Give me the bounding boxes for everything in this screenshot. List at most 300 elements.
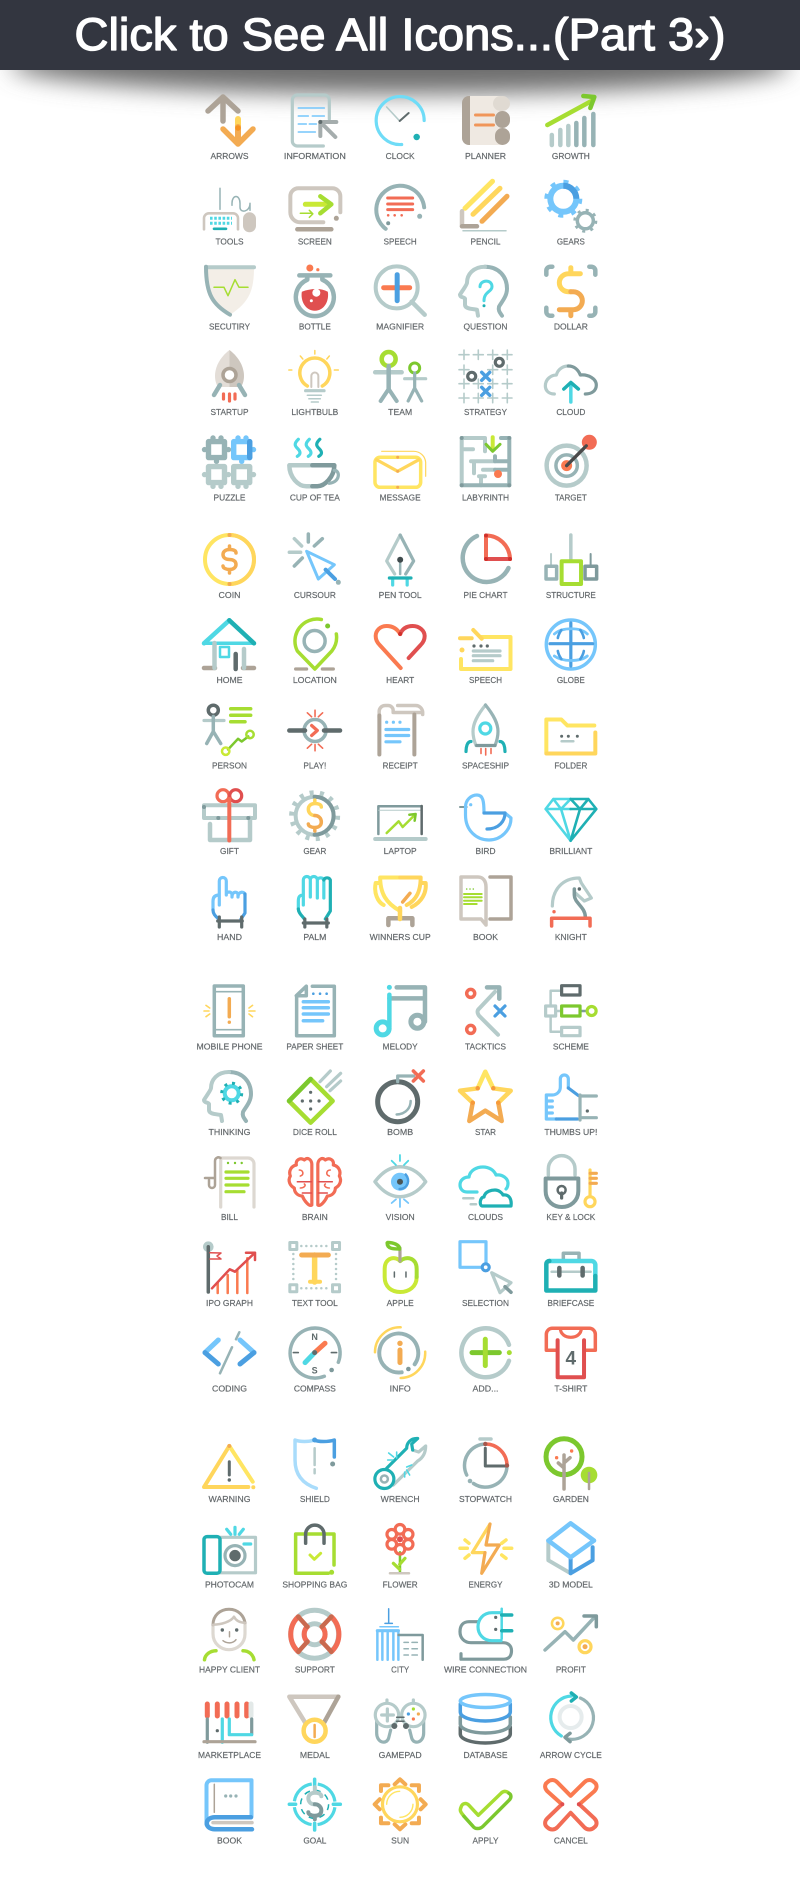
icon: wire connection bbox=[460, 1609, 512, 1659]
icon: medal bbox=[289, 1697, 338, 1742]
cell: thinking bbox=[204, 1072, 251, 1137]
cell: text tool bbox=[290, 1242, 340, 1308]
icon: compass bbox=[290, 1328, 340, 1378]
label: wire connection: WIRE CONNECTION bbox=[444, 1665, 527, 1675]
cell: thumbs up bbox=[544, 1075, 597, 1137]
icon: gamepad bbox=[375, 1700, 425, 1742]
label: structure: STRUCTURE bbox=[546, 590, 596, 600]
icon: cancel bbox=[545, 1780, 597, 1830]
icon: play bbox=[289, 710, 340, 751]
cell: bottle bbox=[296, 268, 334, 332]
label: happy client: HAPPY CLIENT bbox=[199, 1665, 260, 1675]
cell: medal bbox=[289, 1697, 338, 1760]
label: home: HOME bbox=[216, 675, 243, 685]
cell: cancel bbox=[545, 1780, 597, 1845]
cell: melody bbox=[376, 987, 425, 1052]
label: pie chart: PIE CHART bbox=[464, 590, 508, 600]
label: info: INFO bbox=[390, 1383, 411, 1393]
label: screen: SCREEN bbox=[298, 236, 332, 246]
icon: person bbox=[204, 705, 254, 755]
cell: message bbox=[375, 451, 426, 502]
cell: mobile phone bbox=[196, 986, 263, 1052]
label: database: DATABASE bbox=[464, 1750, 508, 1760]
cell: compass bbox=[290, 1328, 340, 1393]
label: cursour: CURSOUR bbox=[294, 590, 336, 600]
cell: location bbox=[293, 619, 337, 685]
icon: labyrinth bbox=[462, 437, 509, 485]
cell: strategy bbox=[459, 350, 512, 417]
icon: winners cup bbox=[375, 878, 426, 925]
icon: pie chart bbox=[463, 536, 510, 582]
icon: happy client bbox=[204, 1609, 254, 1660]
cell: bird bbox=[460, 795, 511, 856]
label: coding: CODING bbox=[212, 1383, 247, 1393]
icon: vision bbox=[375, 1155, 426, 1207]
icon: puzzle bbox=[204, 438, 254, 486]
label: tools: TOOLS bbox=[216, 236, 244, 246]
label: medal: MEDAL bbox=[300, 1750, 330, 1760]
cell: brain bbox=[289, 1159, 341, 1222]
icon: screen bbox=[290, 188, 340, 229]
label: selection: SELECTION bbox=[462, 1298, 509, 1308]
label: add: ADD... bbox=[472, 1383, 498, 1393]
icon: shopping bag bbox=[296, 1525, 334, 1573]
header shadow bbox=[10, 34, 790, 94]
cell: clock bbox=[376, 97, 424, 161]
icon: speech bbox=[376, 186, 424, 229]
cell: shield bbox=[295, 1440, 334, 1504]
cell: paper sheet bbox=[286, 986, 343, 1052]
cell: gear bbox=[292, 793, 338, 856]
compass letter S: S bbox=[312, 1365, 318, 1375]
label: sun: SUN bbox=[391, 1835, 409, 1845]
cell: shopping bag bbox=[282, 1525, 347, 1589]
icon: shield bbox=[295, 1440, 334, 1488]
label: photocam: PHOTOCAM bbox=[205, 1579, 254, 1589]
icon: lightbulb bbox=[289, 350, 338, 402]
icon: flower bbox=[387, 1524, 413, 1573]
cell: cloud bbox=[545, 366, 596, 417]
label: speech: SPEECH bbox=[384, 236, 417, 246]
icon: support bbox=[291, 1610, 339, 1658]
cell: palm bbox=[298, 876, 330, 942]
icon: message bbox=[375, 451, 426, 487]
label: flower: FLOWER bbox=[383, 1579, 418, 1589]
cell: apple bbox=[385, 1242, 417, 1308]
icon: coding bbox=[205, 1332, 254, 1373]
panel: icon group 1 bbox=[204, 95, 596, 502]
icon: star bbox=[460, 1072, 511, 1121]
cell: dollar bbox=[546, 267, 595, 332]
label: thumbs up: THUMBS UP! bbox=[544, 1127, 597, 1137]
icon: folder bbox=[546, 720, 595, 754]
icon: secutiry bbox=[206, 267, 254, 315]
icon: selection bbox=[460, 1242, 511, 1293]
label: support: SUPPORT bbox=[295, 1665, 335, 1675]
icon: information bbox=[292, 95, 336, 146]
cell: lightbulb bbox=[289, 350, 339, 417]
compass letter N: N bbox=[311, 1332, 318, 1342]
label: spaceship: SPACESHIP bbox=[462, 760, 509, 770]
icon: speech 2 bbox=[460, 630, 510, 669]
icon: spaceship bbox=[466, 705, 505, 755]
cell: flower bbox=[383, 1524, 418, 1589]
cell: structure bbox=[546, 535, 597, 600]
label: goal: GOAL bbox=[303, 1835, 327, 1845]
icon: home bbox=[204, 620, 254, 669]
t-shirt number: 4 bbox=[566, 1348, 577, 1369]
label: scheme: SCHEME bbox=[553, 1042, 589, 1052]
icon: growth bbox=[547, 96, 594, 145]
icon: wrench bbox=[375, 1438, 426, 1488]
title: Click to See All Icons...(Part 3›) bbox=[74, 9, 726, 60]
cell: warning bbox=[204, 1446, 253, 1504]
label: gamepad: GAMEPAD bbox=[379, 1750, 422, 1760]
label: melody: MELODY bbox=[383, 1042, 418, 1052]
icon: dollar bbox=[546, 267, 595, 316]
cell: labyrinth bbox=[462, 437, 509, 502]
label: winners cup: WINNERS CUP bbox=[370, 932, 431, 942]
icon: photocam bbox=[204, 1527, 256, 1573]
label: brain: BRAIN bbox=[302, 1212, 328, 1222]
label: heart: HEART bbox=[386, 675, 414, 685]
cell: dice roll bbox=[289, 1071, 341, 1137]
icon: melody bbox=[376, 987, 425, 1035]
label: dice roll: DICE ROLL bbox=[293, 1127, 337, 1137]
label: clouds: CLOUDS bbox=[468, 1212, 503, 1222]
cell: brilliant bbox=[546, 799, 596, 856]
icon: sun bbox=[375, 1779, 426, 1829]
label: team: TEAM bbox=[388, 407, 412, 417]
label: labyrinth: LABYRINTH bbox=[462, 492, 509, 502]
label: lightbulb: LIGHTBULB bbox=[291, 407, 339, 417]
icon: heart bbox=[376, 626, 425, 668]
icon: book bbox=[461, 877, 511, 925]
icon: dice roll bbox=[289, 1071, 341, 1123]
label: target: TARGET bbox=[555, 492, 587, 502]
icon: strategy bbox=[459, 350, 512, 403]
cell: globe bbox=[546, 620, 595, 685]
icon: cup of tea bbox=[289, 439, 338, 486]
icon: book 2 bbox=[206, 1780, 252, 1829]
label: pen tool: PEN TOOL bbox=[379, 590, 422, 600]
cell: gamepad bbox=[375, 1700, 425, 1760]
label: palm: PALM bbox=[303, 932, 326, 942]
label: book: BOOK bbox=[473, 932, 498, 942]
header banner bbox=[0, 0, 800, 70]
cell: magnifier bbox=[376, 266, 425, 332]
icon: database bbox=[460, 1694, 510, 1743]
panel: icon group 3 bbox=[196, 986, 597, 1393]
cell: add bbox=[461, 1328, 509, 1393]
icon: text tool bbox=[290, 1242, 340, 1292]
label: coin: COIN bbox=[218, 590, 240, 600]
cell: selection bbox=[460, 1242, 511, 1308]
label: gift: GIFT bbox=[220, 846, 239, 856]
label: book 2: BOOK bbox=[217, 1835, 242, 1845]
label: text tool: TEXT TOOL bbox=[292, 1298, 338, 1308]
label: cup of tea: CUP OF TEA bbox=[290, 492, 340, 502]
cell: team bbox=[375, 352, 426, 417]
label: pencil: PENCIL bbox=[470, 236, 501, 246]
icon: cloud bbox=[545, 366, 596, 402]
label: stopwatch: STOPWATCH bbox=[459, 1494, 512, 1504]
label: cloud: CLOUD bbox=[556, 407, 585, 417]
icon: magnifier bbox=[376, 266, 425, 315]
cell: t-shirt bbox=[546, 1328, 595, 1393]
cell: goal bbox=[289, 1779, 340, 1845]
label: bird: BIRD bbox=[476, 846, 496, 856]
cell: information bbox=[284, 95, 346, 161]
label: knight: KNIGHT bbox=[555, 932, 587, 942]
label: folder: FOLDER bbox=[554, 760, 587, 770]
icon grid bbox=[196, 95, 602, 1845]
cell: wrench bbox=[375, 1438, 426, 1504]
cell: knight bbox=[552, 878, 591, 942]
cell: stopwatch bbox=[459, 1439, 512, 1504]
icon: structure bbox=[546, 535, 597, 584]
icon: ipo graph bbox=[208, 1247, 255, 1293]
icon: tacktics bbox=[467, 987, 505, 1035]
icon: marketplace bbox=[204, 1704, 255, 1742]
icon: clock bbox=[376, 97, 424, 145]
icon: profit bbox=[545, 1616, 596, 1653]
cell: coding bbox=[205, 1332, 254, 1393]
icon: laptop bbox=[375, 806, 426, 839]
icon: bomb bbox=[378, 1071, 423, 1122]
label: globe: GLOBE bbox=[557, 675, 585, 685]
cell: person bbox=[204, 705, 254, 770]
cell: scheme bbox=[546, 986, 596, 1052]
cell: profit bbox=[545, 1616, 596, 1675]
label: profit: PROFIT bbox=[556, 1665, 586, 1675]
icon: city bbox=[377, 1609, 423, 1660]
cell: secutiry bbox=[206, 267, 254, 332]
label: bill: BILL bbox=[221, 1212, 238, 1222]
cell: hand bbox=[213, 878, 245, 942]
label: play: PLAY! bbox=[303, 760, 326, 770]
label: gear: GEAR bbox=[303, 846, 326, 856]
cell: bomb bbox=[378, 1071, 423, 1137]
label: marketplace: MARKETPLACE bbox=[198, 1750, 261, 1760]
cell: arrows bbox=[208, 97, 253, 161]
cell: photocam bbox=[204, 1527, 256, 1589]
label: dollar: DOLLAR bbox=[554, 322, 588, 332]
cell: screen bbox=[290, 188, 340, 246]
label: garden: GARDEN bbox=[553, 1494, 589, 1504]
cell: folder bbox=[546, 720, 595, 770]
cell: arrow cycle bbox=[540, 1693, 602, 1760]
icon: receipt bbox=[379, 706, 423, 754]
icon: pen tool bbox=[387, 535, 414, 585]
cell: heart bbox=[376, 626, 425, 685]
icon: apply bbox=[460, 1791, 511, 1829]
icon: bird bbox=[460, 795, 511, 840]
cell: startup bbox=[210, 350, 249, 417]
label: message: MESSAGE bbox=[380, 492, 421, 502]
cell: coin bbox=[205, 535, 254, 600]
cell: happy client bbox=[199, 1609, 260, 1675]
icon: key and lock bbox=[546, 1156, 596, 1207]
cell: play bbox=[289, 710, 340, 770]
label: apple: APPLE bbox=[387, 1298, 414, 1308]
icon: thinking bbox=[204, 1072, 251, 1121]
icon: gift bbox=[204, 790, 255, 840]
cell: cup of tea bbox=[289, 439, 340, 502]
label: arrows: ARROWS bbox=[210, 151, 249, 161]
label: apply: APPLY bbox=[472, 1835, 499, 1845]
cell: sun bbox=[375, 1779, 426, 1845]
icon: thumbs up bbox=[546, 1075, 596, 1120]
label: thinking: THINKING bbox=[208, 1127, 250, 1137]
icon: hand bbox=[213, 878, 245, 927]
cell: energy bbox=[460, 1524, 512, 1589]
cell: planner bbox=[462, 96, 510, 161]
cell: growth bbox=[547, 96, 594, 161]
label: information: INFORMATION bbox=[284, 151, 346, 161]
cell: pie chart bbox=[463, 536, 510, 600]
label: shield: SHIELD bbox=[300, 1494, 330, 1504]
label: tacktics: TACKTICS bbox=[465, 1042, 506, 1052]
icon: pencil bbox=[462, 181, 507, 231]
cell: spaceship bbox=[462, 705, 509, 770]
cell: key and lock bbox=[546, 1156, 596, 1222]
label: warning: WARNING bbox=[208, 1494, 250, 1504]
cell: winners cup bbox=[370, 878, 431, 942]
label: brilliant: BRILLIANT bbox=[549, 846, 592, 856]
label: bomb: BOMB bbox=[387, 1127, 414, 1137]
icon: apple bbox=[385, 1242, 417, 1292]
icon: cursour bbox=[289, 534, 338, 582]
label: ipo graph: IPO GRAPH bbox=[206, 1298, 253, 1308]
icon: info bbox=[375, 1327, 425, 1378]
label: star: STAR bbox=[475, 1127, 496, 1137]
cell: apply bbox=[460, 1791, 511, 1845]
label: t-shirt: T-SHIRT bbox=[554, 1383, 587, 1393]
icon: planner bbox=[462, 96, 510, 145]
label: bottle: BOTTLE bbox=[299, 322, 331, 332]
cell: gift bbox=[204, 790, 255, 856]
label: energy: ENERGY bbox=[468, 1579, 503, 1589]
cell: laptop bbox=[375, 806, 426, 856]
icon: stopwatch bbox=[464, 1439, 507, 1487]
icon: tools bbox=[204, 188, 256, 232]
cell: star bbox=[460, 1072, 511, 1137]
cell: bill bbox=[205, 1157, 254, 1222]
icon: question bbox=[460, 267, 507, 316]
cell: city bbox=[377, 1609, 423, 1675]
icon: paper sheet bbox=[296, 986, 334, 1036]
icon: knight bbox=[552, 878, 591, 926]
label: gears: GEARS bbox=[557, 236, 585, 246]
label: secutiry: SECUTIRY bbox=[209, 322, 250, 332]
icon: bottle bbox=[296, 268, 334, 316]
label: growth: GROWTH bbox=[552, 151, 590, 161]
icon: palm bbox=[298, 876, 330, 927]
icon: warning bbox=[204, 1446, 253, 1487]
label: speech 2: SPEECH bbox=[469, 675, 502, 685]
cell: info bbox=[375, 1327, 425, 1393]
cell: marketplace bbox=[198, 1704, 261, 1760]
cell: briefcase bbox=[546, 1253, 595, 1308]
cell: garden bbox=[546, 1439, 589, 1504]
cell: cursour bbox=[289, 534, 338, 600]
icon: add bbox=[461, 1328, 509, 1377]
icon: brilliant bbox=[546, 799, 596, 841]
cell: gears bbox=[546, 182, 596, 246]
icon: arrows bbox=[208, 97, 253, 144]
cell: ipo graph bbox=[206, 1247, 255, 1308]
panel: icon group 4 bbox=[198, 1438, 602, 1845]
cell: target bbox=[547, 442, 589, 502]
cell: tools bbox=[204, 188, 256, 246]
icon: team bbox=[375, 352, 426, 401]
label: briefcase: BRIEFCASE bbox=[547, 1298, 595, 1308]
cell: speech bbox=[376, 186, 424, 246]
label: arrow cycle: ARROW CYCLE bbox=[540, 1750, 602, 1760]
label: mobile phone: MOBILE PHONE bbox=[196, 1042, 263, 1052]
icon: coin bbox=[205, 535, 254, 584]
icon: target bbox=[547, 442, 589, 486]
icon: startup bbox=[214, 350, 245, 401]
icon: brain bbox=[289, 1159, 341, 1205]
icon: bill bbox=[205, 1157, 254, 1207]
cell: database bbox=[460, 1694, 510, 1760]
cell: support bbox=[291, 1610, 339, 1675]
cell: 3d model bbox=[548, 1523, 594, 1589]
label: startup: STARTUP bbox=[210, 407, 249, 417]
cell: clouds bbox=[460, 1167, 511, 1222]
label: city: CITY bbox=[391, 1665, 409, 1675]
label: planner: PLANNER bbox=[465, 151, 506, 161]
icon: location bbox=[295, 619, 337, 669]
cell: vision bbox=[375, 1155, 426, 1222]
icon: gear bbox=[292, 793, 338, 839]
icon: energy bbox=[460, 1524, 512, 1573]
label: receipt: RECEIPT bbox=[383, 760, 418, 770]
label: 3d model: 3D MODEL bbox=[549, 1579, 593, 1589]
label: shopping bag: SHOPPING BAG bbox=[282, 1579, 347, 1589]
cell: pencil bbox=[462, 181, 507, 246]
cell: puzzle bbox=[204, 438, 254, 502]
icon: garden bbox=[546, 1439, 589, 1489]
label: key and lock: KEY & LOCK bbox=[546, 1212, 596, 1222]
cell: pen tool bbox=[379, 535, 422, 600]
icon: goal bbox=[289, 1779, 340, 1830]
icon: gears bbox=[546, 182, 596, 231]
icon: globe bbox=[546, 620, 595, 669]
label: question: QUESTION bbox=[464, 322, 508, 332]
icon: clouds bbox=[460, 1167, 511, 1206]
icon: mobile phone bbox=[204, 986, 255, 1036]
label: puzzle: PUZZLE bbox=[214, 492, 246, 502]
label: magnifier: MAGNIFIER bbox=[376, 322, 424, 332]
label: wrench: WRENCH bbox=[381, 1494, 420, 1504]
cell: wire connection bbox=[444, 1609, 527, 1675]
icon: 3d model bbox=[548, 1523, 594, 1573]
label: clock: CLOCK bbox=[386, 151, 415, 161]
cell: speech 2 bbox=[460, 630, 510, 685]
cell: home bbox=[204, 620, 254, 685]
label: cancel: CANCEL bbox=[554, 1835, 588, 1845]
label: paper sheet: PAPER SHEET bbox=[286, 1042, 343, 1052]
label: hand: HAND bbox=[217, 932, 242, 942]
label: strategy: STRATEGY bbox=[464, 407, 507, 417]
label: person: PERSON bbox=[212, 760, 247, 770]
icon: scheme bbox=[546, 986, 596, 1036]
label: laptop: LAPTOP bbox=[384, 846, 417, 856]
label: compass: COMPASS bbox=[294, 1383, 336, 1393]
